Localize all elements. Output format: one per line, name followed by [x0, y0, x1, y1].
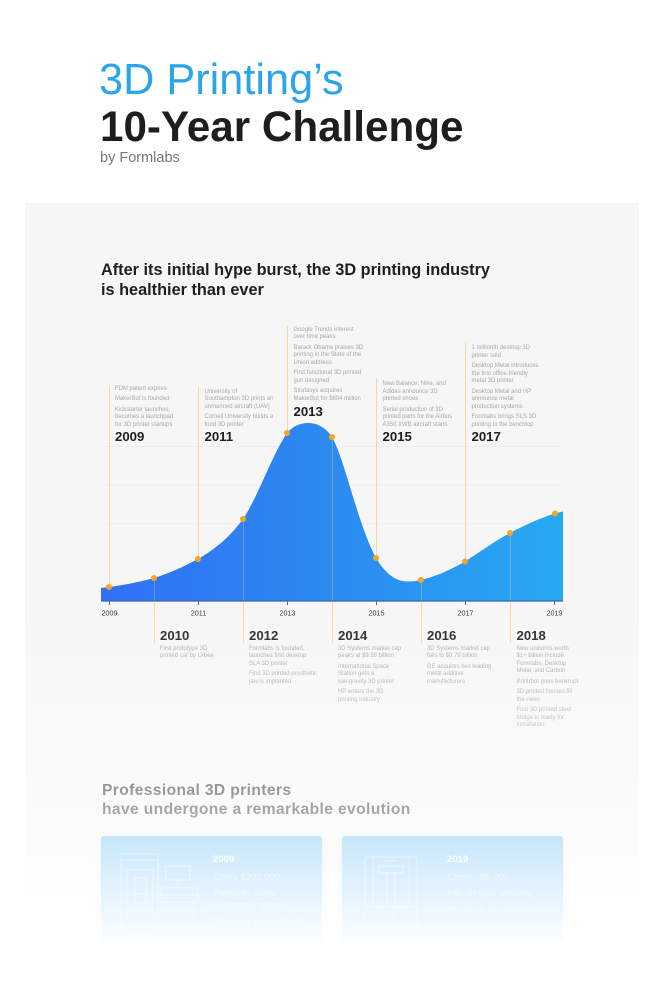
event: 2016: manufacturers: [427, 678, 465, 684]
event: 2012: launches first desktop: [249, 653, 306, 659]
event: 2016: 3D Systems market cap: [427, 646, 490, 652]
event: 2016: falls to $0.79 billion: [427, 653, 478, 659]
panel: grey background: [25, 203, 639, 999]
event: 2009: becomes a launchpad: [115, 414, 173, 420]
event: 2013: over time peaks: [294, 334, 335, 340]
card text: 2019: Costs ~$5,000: [447, 872, 509, 883]
event: 2015: Adidas announce 3D: [382, 388, 438, 394]
connector lines: [110, 326, 510, 643]
event: 2013: MakerBot for $604 million: [294, 396, 361, 402]
x axis: 2015: [368, 608, 384, 618]
x axis: 2011: [191, 608, 206, 618]
event: 2014: 3D Systems market cap: [338, 646, 401, 652]
event: 2012: Formlabs is founded,: [249, 646, 304, 652]
event: 2013: printing in the State of the: [294, 352, 361, 358]
event: 2017: printing to the benchtop: [472, 422, 534, 428]
event: 2009: MakerBot is founded: [115, 396, 169, 402]
event: 2015: printed shoes: [382, 396, 418, 402]
title line 1: 3D Printing’s: [99, 56, 344, 104]
panel: 2009 printer card: [101, 836, 322, 961]
x axis: 2017: [458, 608, 474, 618]
event: 2011: unmanned aircraft (UAV): [204, 404, 270, 410]
event: 2018: installation: [516, 722, 545, 728]
x axis: [101, 601, 563, 618]
event: 2016: [427, 646, 491, 684]
icon: 2009 printer: [120, 854, 198, 914]
title line 2: 10-Year Challenge: [100, 103, 463, 150]
event: 2018: New unicorns worth: [516, 646, 569, 652]
card text: 2009: Costs $200,000: [213, 872, 280, 883]
heading: evolution: Professional 3D printers: [102, 782, 291, 798]
x axis: 2013: [280, 608, 296, 618]
event: 2017: Desktop Metal introduces: [472, 363, 538, 369]
event: 2017: production systems: [472, 404, 523, 410]
event: 2013: Barack Obama praises 3D: [294, 344, 363, 350]
year: 2013: 2013: [294, 404, 323, 418]
event: 2015: Serial production of 3D: [382, 406, 443, 412]
event: 2014: International Space: [338, 664, 389, 670]
event: 2017: [472, 344, 538, 428]
year: 2014: 2014: [338, 628, 367, 642]
event: 2013: First functional 3D printed: [294, 370, 361, 376]
event: 2018: the news: [516, 696, 540, 702]
event: 2017: announce metal: [472, 396, 514, 402]
card text: 2019: 2019: [447, 854, 468, 865]
event: 2018: Metal, and Carbon: [516, 668, 565, 674]
year: 2015: 2015: [382, 429, 412, 444]
event: 2018: Printrbot goes bankrupt: [516, 678, 578, 684]
event: 2013: Google Trends interest: [294, 326, 354, 332]
event: 2010: printed car by Urbee: [160, 653, 214, 659]
event: 2014: printing industry: [338, 696, 380, 702]
event: 2014: low-gravity 3D printer: [338, 678, 394, 684]
year: 2010: 2010: [160, 628, 189, 642]
year: 2016: 2016: [427, 628, 456, 642]
card text: 2009: 2009: [213, 854, 234, 865]
card text: 2019: Plug and play: [447, 905, 505, 916]
chart area: [101, 423, 563, 601]
event: 2018: $1+ billion include: [516, 653, 564, 659]
event: 2010: First prototype 3D: [160, 646, 207, 652]
data points: [106, 430, 558, 590]
event: 2018: bridge is ready for: [516, 714, 564, 720]
heading: industry: is healthier than ever: [101, 280, 264, 298]
event: 2011: Southampton 3D prints an: [204, 396, 273, 402]
title: [99, 56, 463, 166]
event: 2009: [115, 386, 173, 428]
event: 2011: [204, 388, 274, 428]
event: 2018: Formlabs, Desktop: [516, 660, 566, 666]
event: 2016: GE acquires two leading: [427, 664, 491, 670]
year: 2012: 2012: [249, 628, 278, 642]
heading: industry: [101, 261, 490, 298]
heading: evolution: have undergone a remarkable evolution: [102, 800, 411, 818]
event: 2015: New Balance, Nike, and: [382, 381, 446, 387]
event: 2018: First 3D printed steel: [516, 707, 571, 713]
year: 2017: 2017: [472, 429, 501, 444]
event: 2009: Kickstarter launches,: [115, 406, 170, 412]
card text: 2009: dedicated space: [213, 900, 283, 911]
event: 2011: University of: [204, 388, 237, 394]
event: 2014: [338, 646, 401, 702]
event: 2015: A350 XWB aircraft starts: [382, 422, 448, 428]
event: 2013: [294, 326, 363, 402]
year: 2018: 2018: [516, 628, 546, 642]
event: 2013: Stratasys acquires: [294, 388, 342, 394]
card text: 2019: Fits on your desktop: [447, 888, 533, 899]
event: 2012: [248, 646, 317, 684]
event: 2009: for 3D printer startups: [115, 422, 172, 428]
year: 2011: 2011: [204, 429, 233, 444]
card text: 2009: Requires large: [213, 888, 275, 899]
event: 2014: peaks at $9.98 billion: [338, 653, 394, 659]
event: 2017: metal 3D printer: [472, 378, 514, 384]
event: 2017: the first office-friendly: [472, 370, 528, 376]
event: 2009: FDM patent expires: [115, 386, 167, 392]
card text: 2019: [447, 854, 533, 916]
heading: industry: After its initial hype burst, the 3D printing industry: [101, 261, 490, 279]
event: 2010: [160, 646, 214, 659]
event: 2013: gun designed: [294, 378, 329, 384]
byline: by Formlabs: [100, 150, 180, 166]
x axis: 2009: [102, 608, 118, 618]
event: 2018: [516, 646, 578, 728]
card text: 2009: [213, 854, 304, 928]
event: 2017: printer sold: [472, 352, 501, 358]
event: 2012: SLA 3D printer: [249, 660, 288, 666]
event: 2017: 1 millionth desktop 3D: [472, 345, 530, 351]
icon: 2019 printer: [364, 856, 418, 914]
event: 2013: Union address: [294, 360, 332, 366]
event: 2011: Cornell University builds a: [204, 414, 273, 420]
year: 2009: 2009: [115, 429, 144, 444]
event: 2016: metal additive: [427, 671, 464, 677]
event: 2011: food 3D printer: [204, 422, 244, 428]
card text: 2009: Requires trained staff: [213, 917, 304, 928]
event: 2012: First 3D printed prosthetic: [249, 671, 317, 677]
event: 2018: 3D printed houses fill: [516, 689, 572, 695]
event: 2017: Formlabs brings SLS 3D: [472, 414, 536, 420]
event: 2015: [382, 380, 452, 428]
event: 2014: Station gets a: [338, 671, 374, 677]
event: 2014: HP enters the 3D: [338, 689, 383, 695]
event: 2017: Desktop Metal and HP: [472, 388, 531, 394]
x axis: 2019: [546, 608, 562, 618]
panel: 2019 printer card: [342, 836, 563, 961]
heading: evolution: [102, 782, 411, 818]
event: 2015: printed parts for the Airbus: [382, 414, 452, 420]
event: 2012: jaw is implanted: [249, 678, 291, 684]
